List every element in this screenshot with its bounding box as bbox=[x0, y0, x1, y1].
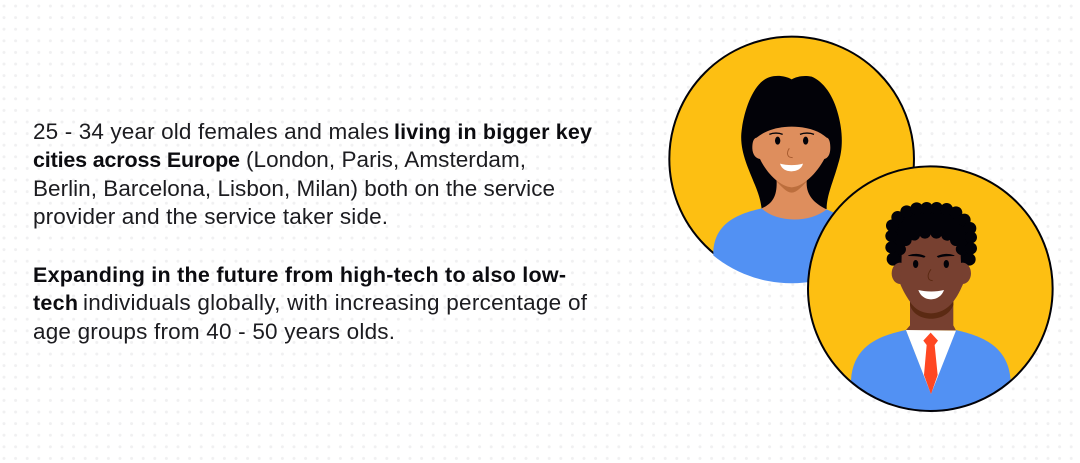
text block: future expansion: individuals globally, with increasing percentage of bbox=[83, 290, 588, 315]
text block: current audience: (London, Paris, Amsterdam, bbox=[246, 147, 526, 172]
text block: future expansion: Expanding in the future from high-tech to also low- bbox=[33, 263, 566, 287]
hair bbox=[885, 202, 977, 266]
icon: woman avatar bbox=[669, 37, 914, 288]
icon: man avatar bbox=[808, 166, 1053, 420]
text block: future expansion bbox=[33, 263, 588, 344]
text block: current audience: cities across Europe bbox=[33, 148, 240, 172]
text block: current audience: Berlin, Barcelona, Lisbon, Milan) both on the service bbox=[33, 176, 555, 201]
text block: future expansion: age groups from 40 - 50 years olds. bbox=[33, 319, 395, 344]
text block: future expansion: tech bbox=[33, 291, 78, 315]
text block: current audience: living in bigger key bbox=[394, 120, 592, 144]
text block: current audience bbox=[33, 119, 592, 229]
text block: current audience: 25 - 34 year old females and males bbox=[33, 119, 389, 144]
text block: current audience: provider and the service taker side. bbox=[33, 204, 388, 229]
